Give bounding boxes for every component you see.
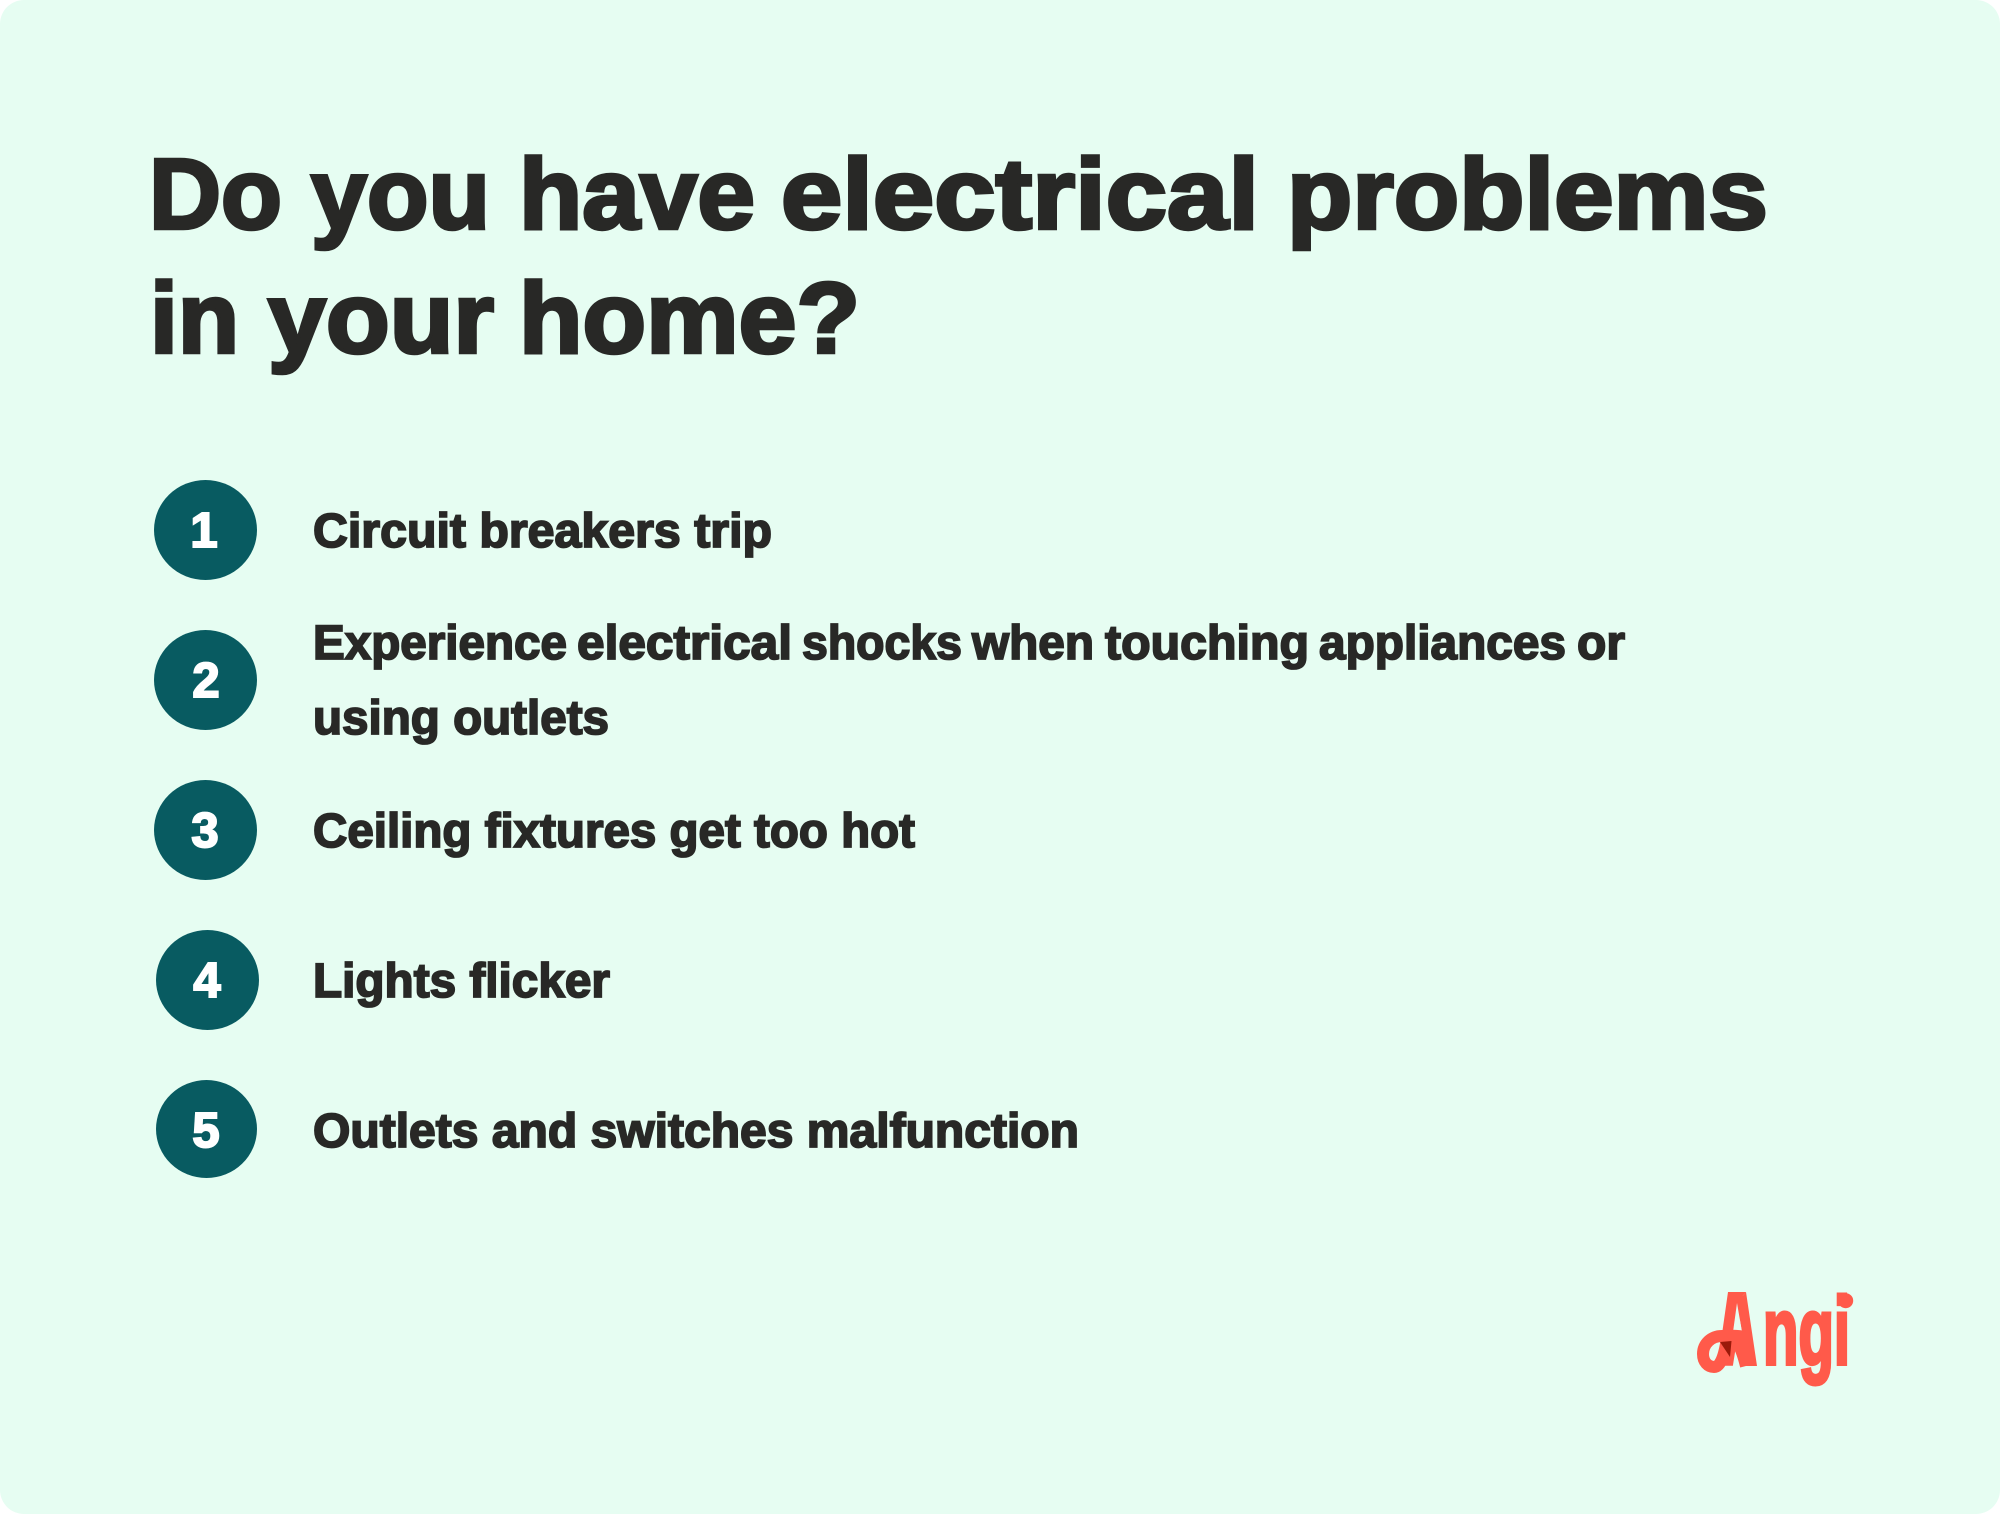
- title: Do: [149, 138, 282, 250]
- title: you: [311, 138, 490, 250]
- title: your: [268, 262, 494, 374]
- item 2: [154, 617, 1625, 745]
- item 5: Outlets and switches malfunction: [313, 1105, 1079, 1158]
- item 5: [156, 1080, 1079, 1178]
- item 4: [156, 930, 610, 1030]
- item 2: using outlets: [313, 692, 609, 745]
- item 3: Ceiling fixtures get too hot: [313, 805, 915, 858]
- logo: Angi: ngi: [1763, 1278, 1850, 1385]
- title: [149, 138, 1768, 374]
- logo: Angi: A: [1725, 1278, 1756, 1385]
- title: in: [150, 262, 239, 374]
- item 2: touching: [1105, 617, 1309, 670]
- item 2: appliances: [1319, 617, 1566, 670]
- item 3: [154, 780, 915, 880]
- title: have: [519, 138, 755, 250]
- item 1: [154, 480, 772, 580]
- title: problems: [1287, 138, 1768, 250]
- item 2: electrical: [577, 617, 792, 670]
- item 4: Lights flicker: [313, 955, 610, 1008]
- item 2: Experience: [313, 617, 567, 670]
- item 2: or: [1577, 617, 1625, 670]
- numbered list: [154, 480, 1625, 1178]
- item 4: 4: [193, 954, 221, 1008]
- title: home?: [519, 262, 860, 374]
- item 2: shocks: [802, 617, 962, 670]
- title: electrical: [781, 138, 1259, 250]
- item 1: Circuit breakers trip: [313, 505, 772, 558]
- item 1: 1: [190, 504, 218, 558]
- item 2: 2: [192, 654, 220, 708]
- logo: Angi: [1703, 1278, 1853, 1385]
- item 2: when: [971, 617, 1094, 670]
- item 5: 5: [192, 1104, 220, 1158]
- item 3: 3: [191, 804, 219, 858]
